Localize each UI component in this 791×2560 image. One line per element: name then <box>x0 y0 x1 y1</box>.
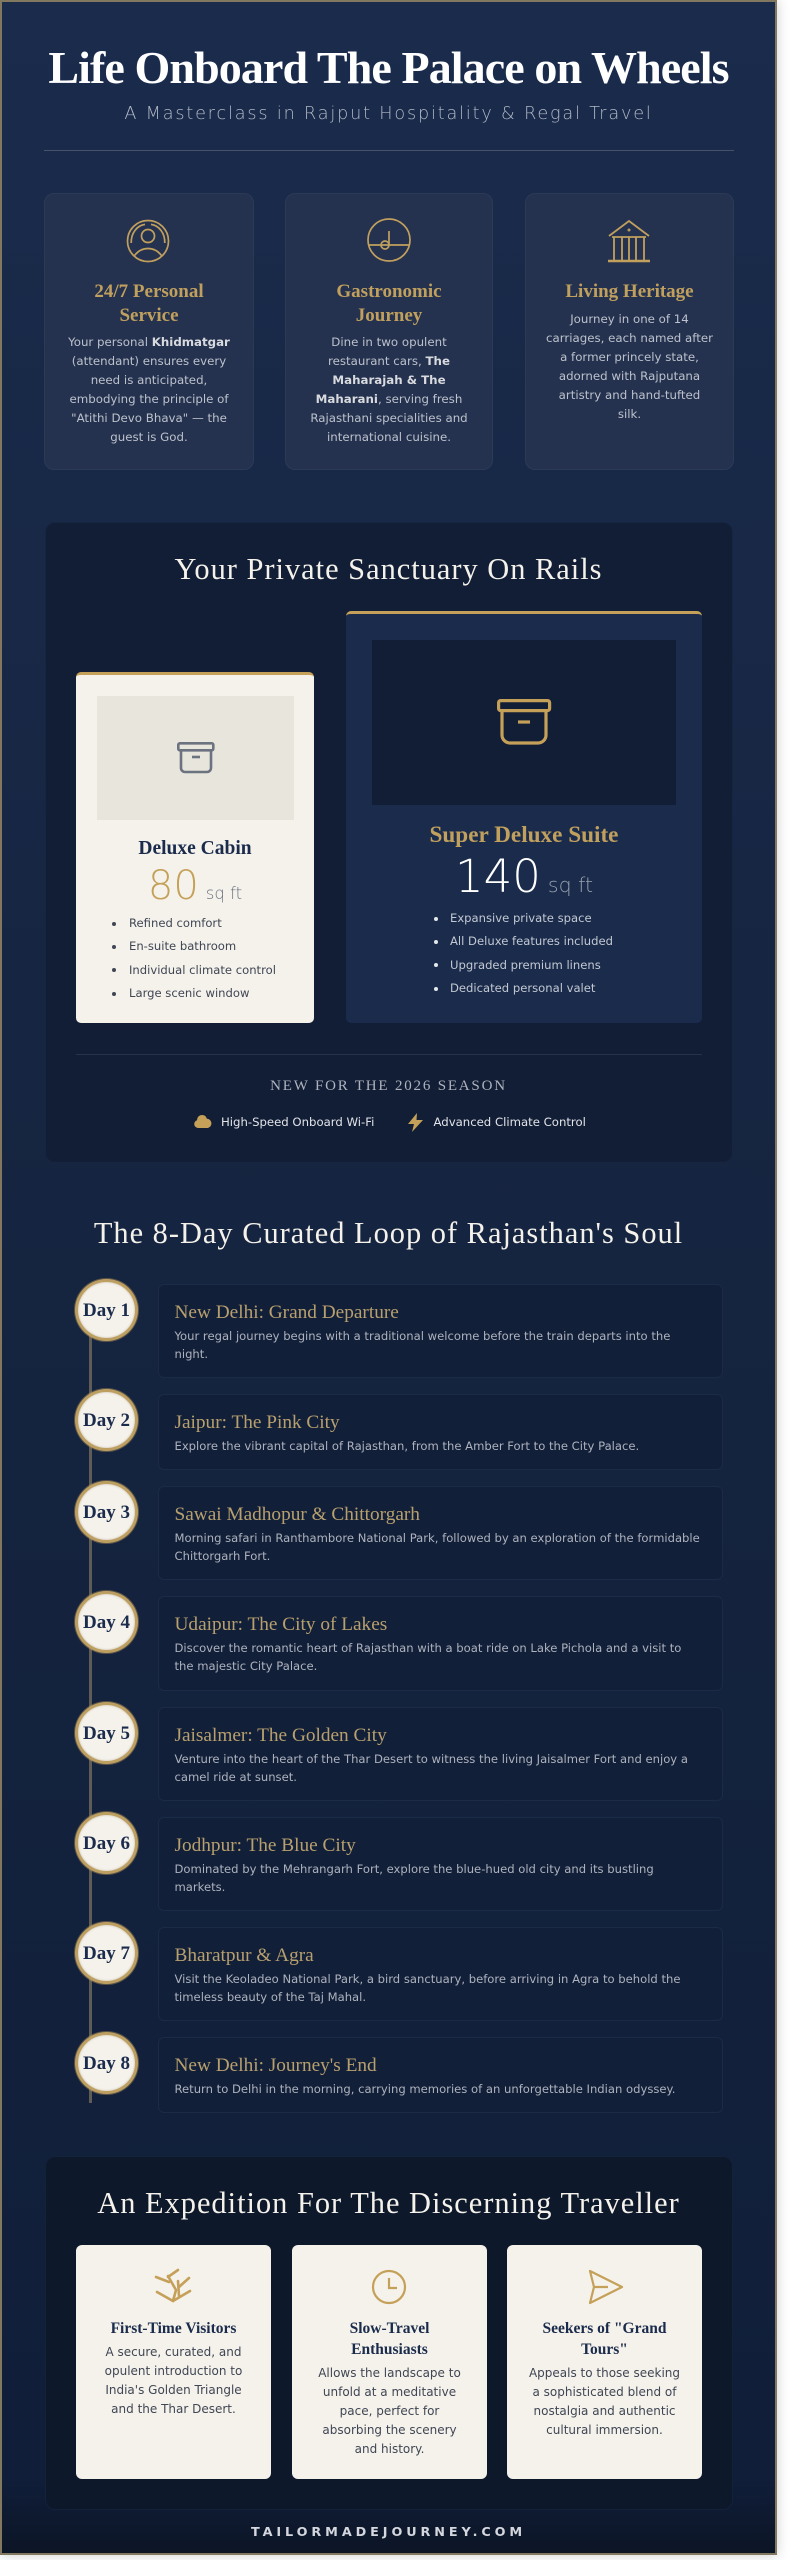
heading: Slow-Travel <box>350 2320 429 2337</box>
card: markets. <box>174 1880 225 1894</box>
text: restaurant cars, The <box>328 354 450 368</box>
card: Jaipur: The Pink City <box>174 1412 340 1433</box>
size: 80 sq ft <box>148 863 242 909</box>
text: embodying the principle of <box>69 392 229 406</box>
day 3 <box>74 1480 723 1580</box>
card: New Delhi: Journey's End <box>174 2055 377 2076</box>
text <box>546 312 713 421</box>
text: (attendant) ensures every <box>72 354 226 368</box>
icon: heritage building <box>608 220 650 262</box>
card: night. <box>174 1347 208 1361</box>
text: adorned with Rajputana <box>559 369 700 383</box>
feature: climate: Advanced Climate Control <box>434 1115 586 1129</box>
badge <box>75 1389 138 1451</box>
icon: sprout <box>154 2268 192 2302</box>
card <box>158 1817 723 1911</box>
footer: TAILORMADEJOURNEY.COM <box>251 2525 526 2540</box>
text: guest is God. <box>110 430 188 444</box>
page container: Dedicated personal valet <box>450 981 595 995</box>
badge: Day 8 <box>83 2053 130 2074</box>
heading: Living Heritage <box>565 281 694 302</box>
badge: Day 6 <box>83 1833 130 1854</box>
panel: deluxe cabin <box>76 672 314 1023</box>
name: Deluxe Cabin <box>138 838 252 859</box>
text: and the Thar Desert. <box>111 2402 236 2416</box>
heading: Service <box>119 304 179 326</box>
list: suite features <box>434 911 613 995</box>
card: Jaisalmer: The Golden City <box>174 1725 387 1746</box>
name: Super Deluxe Suite <box>430 822 618 848</box>
icon: box <box>177 742 215 774</box>
card: the majestic City Palace. <box>174 1659 317 1673</box>
badge: Day 7 <box>83 1943 130 1964</box>
card: Sawai Madhopur & Chittorgarh <box>174 1504 420 1525</box>
text <box>310 335 468 444</box>
day 7 <box>74 1921 723 2021</box>
text: Appeals to those seeking <box>529 2366 680 2380</box>
badge: Day 4 <box>83 1612 130 1633</box>
page container: Upgraded premium linens <box>450 958 601 972</box>
text: and history. <box>355 2442 424 2456</box>
subtitle: A Masterclass in Rajput Hospitality & Regal Travel <box>124 104 653 124</box>
card <box>158 1927 723 2021</box>
day 4 <box>74 1590 723 1691</box>
card <box>158 1394 723 1470</box>
day 2 <box>74 1388 723 1470</box>
image placeholder <box>97 696 294 820</box>
text: a sophisticated blend of <box>532 2385 677 2399</box>
card: first-time visitors <box>76 2245 271 2479</box>
card: timeless beauty of the Taj Mahal. <box>174 1990 366 2004</box>
card <box>158 1707 723 1801</box>
image placeholder <box>372 640 676 805</box>
card: Venture into the heart of the Thar Desert to witness the living Jaisalmer Fort and enjoy a <box>174 1752 688 1766</box>
text: A secure, curated, and <box>106 2345 241 2359</box>
heading: First-Time Visitors <box>111 2320 236 2337</box>
card: Return to Delhi in the morning, carrying memories of an unforgettable Indian odyssey. <box>174 2082 675 2096</box>
icon: person in circle <box>126 220 170 262</box>
card: Morning safari in Ranthambore National Park, followed by an exploration of the formidable <box>174 1531 700 1545</box>
badge <box>75 1481 138 1543</box>
card: grand tours <box>507 2245 702 2479</box>
day 1 <box>74 1278 723 1378</box>
card <box>158 1284 723 1378</box>
card: camel ride at sunset. <box>174 1770 297 1784</box>
badge <box>75 2032 138 2094</box>
text: Dine in two opulent <box>331 335 447 349</box>
size: 140 sq ft <box>455 850 593 903</box>
heading <box>336 281 442 326</box>
panel: living heritage <box>525 193 734 470</box>
text: artistry and hand-tufted <box>559 388 700 402</box>
heading: Enthusiasts <box>351 2341 428 2358</box>
text: silk. <box>618 407 641 421</box>
badge <box>75 1279 138 1341</box>
icon: dining plate <box>367 218 411 262</box>
card: Discover the romantic heart of Rajasthan with a boat ride on Lake Pichola and a visit to <box>174 1641 681 1655</box>
icon: paper plane <box>588 2270 624 2304</box>
text: Journey in one of 14 <box>570 312 689 326</box>
day 8 <box>74 2031 723 2113</box>
panel: sanctuary <box>45 522 733 1163</box>
card: Your regal journey begins with a traditional welcome before the train departs into the <box>174 1329 670 1343</box>
card: Visit the Keoladeo National Park, a bird sanctuary, before arriving in Agra to behold the <box>174 1972 680 1986</box>
badge <box>75 1812 138 1874</box>
text: unfold at a meditative <box>323 2385 456 2399</box>
heading: Seekers of "Grand <box>542 2320 666 2337</box>
card: New Delhi: Grand Departure <box>174 1302 399 1323</box>
text: nostalgia and authentic <box>534 2404 676 2418</box>
panel: personal service <box>44 193 254 470</box>
heading: Gastronomic <box>336 281 442 302</box>
day 5 <box>74 1701 723 1801</box>
icon: box <box>497 699 552 745</box>
text <box>105 2345 242 2416</box>
card <box>158 2037 723 2113</box>
page container: Individual climate control <box>129 963 276 977</box>
badge: Day 2 <box>83 1410 130 1431</box>
badge <box>75 1702 138 1764</box>
text: Allows the landscape to <box>318 2366 461 2380</box>
card: Dominated by the Mehrangarh Fort, explore the blue-hued old city and its bustling <box>174 1862 654 1876</box>
card: Udaipur: The City of Lakes <box>174 1614 387 1635</box>
panel: audience <box>45 2156 733 2510</box>
card: Jodhpur: The Blue City <box>174 1835 356 1856</box>
icon: clock <box>372 2270 406 2304</box>
list: deluxe features <box>112 916 276 1000</box>
page container: En-suite bathroom <box>129 939 236 953</box>
text: a former princely state, <box>560 350 699 364</box>
badge: Day 3 <box>83 1502 130 1523</box>
panel: gastronomic journey <box>285 193 493 470</box>
text: "Atithi Devo Bhava" — the <box>71 411 227 425</box>
text: India's Golden Triangle <box>105 2383 242 2397</box>
text <box>318 2366 461 2456</box>
icon: cloud <box>194 1115 212 1128</box>
text <box>529 2366 680 2437</box>
text: international cuisine. <box>327 430 451 444</box>
heading <box>94 281 204 326</box>
card: Explore the vibrant capital of Rajasthan, from the Amber Fort to the City Palace. <box>174 1439 639 1453</box>
text: Your personal Khidmatgar <box>68 335 230 349</box>
badge: Day 5 <box>83 1723 130 1744</box>
page container: Large scenic window <box>129 986 249 1000</box>
heading <box>542 2320 666 2358</box>
title: Life Onboard The Palace on Wheels <box>48 42 729 93</box>
text: absorbing the scenery <box>322 2423 457 2437</box>
text: carriages, each named after <box>546 331 713 345</box>
day 6 <box>74 1811 723 1911</box>
text: need is anticipated, <box>91 373 207 387</box>
text: opulent introduction to <box>105 2364 242 2378</box>
panel: super deluxe suite <box>346 611 702 1023</box>
feature: wifi: High-Speed Onboard Wi-Fi <box>221 1115 374 1129</box>
text <box>68 335 230 444</box>
heading: Tours" <box>581 2341 628 2358</box>
text: pace, perfect for <box>340 2404 439 2418</box>
text: Maharajah & The <box>332 373 446 387</box>
card <box>158 1486 723 1580</box>
icon: bolt <box>408 1113 423 1132</box>
heading <box>350 2320 430 2358</box>
page container: Expansive private space <box>450 911 592 925</box>
label: new for 2026: NEW FOR THE 2026 SEASON <box>270 1078 507 1094</box>
text: Maharani, serving fresh <box>316 392 462 406</box>
page container: Refined comfort <box>129 916 222 930</box>
badge <box>75 1922 138 1984</box>
heading: Journey <box>356 304 422 326</box>
card: slow travel <box>292 2245 487 2479</box>
text: Rajasthani specialities and <box>310 411 468 425</box>
card: Chittorgarh Fort. <box>174 1549 270 1563</box>
card <box>158 1596 723 1691</box>
heading: audience: An Expedition For The Discerning Traveller <box>97 2186 680 2220</box>
heading: sanctuary: Your Private Sanctuary On Rails <box>174 552 603 586</box>
badge: Day 1 <box>83 1300 130 1321</box>
card: Bharatpur & Agra <box>174 1945 314 1966</box>
heading: 24/7 Personal <box>94 281 204 302</box>
text: cultural immersion. <box>546 2423 663 2437</box>
heading: itinerary: The 8-Day Curated Loop of Rajasthan's Soul <box>94 1216 683 1250</box>
badge <box>75 1591 138 1653</box>
page container: All Deluxe features included <box>450 934 613 948</box>
